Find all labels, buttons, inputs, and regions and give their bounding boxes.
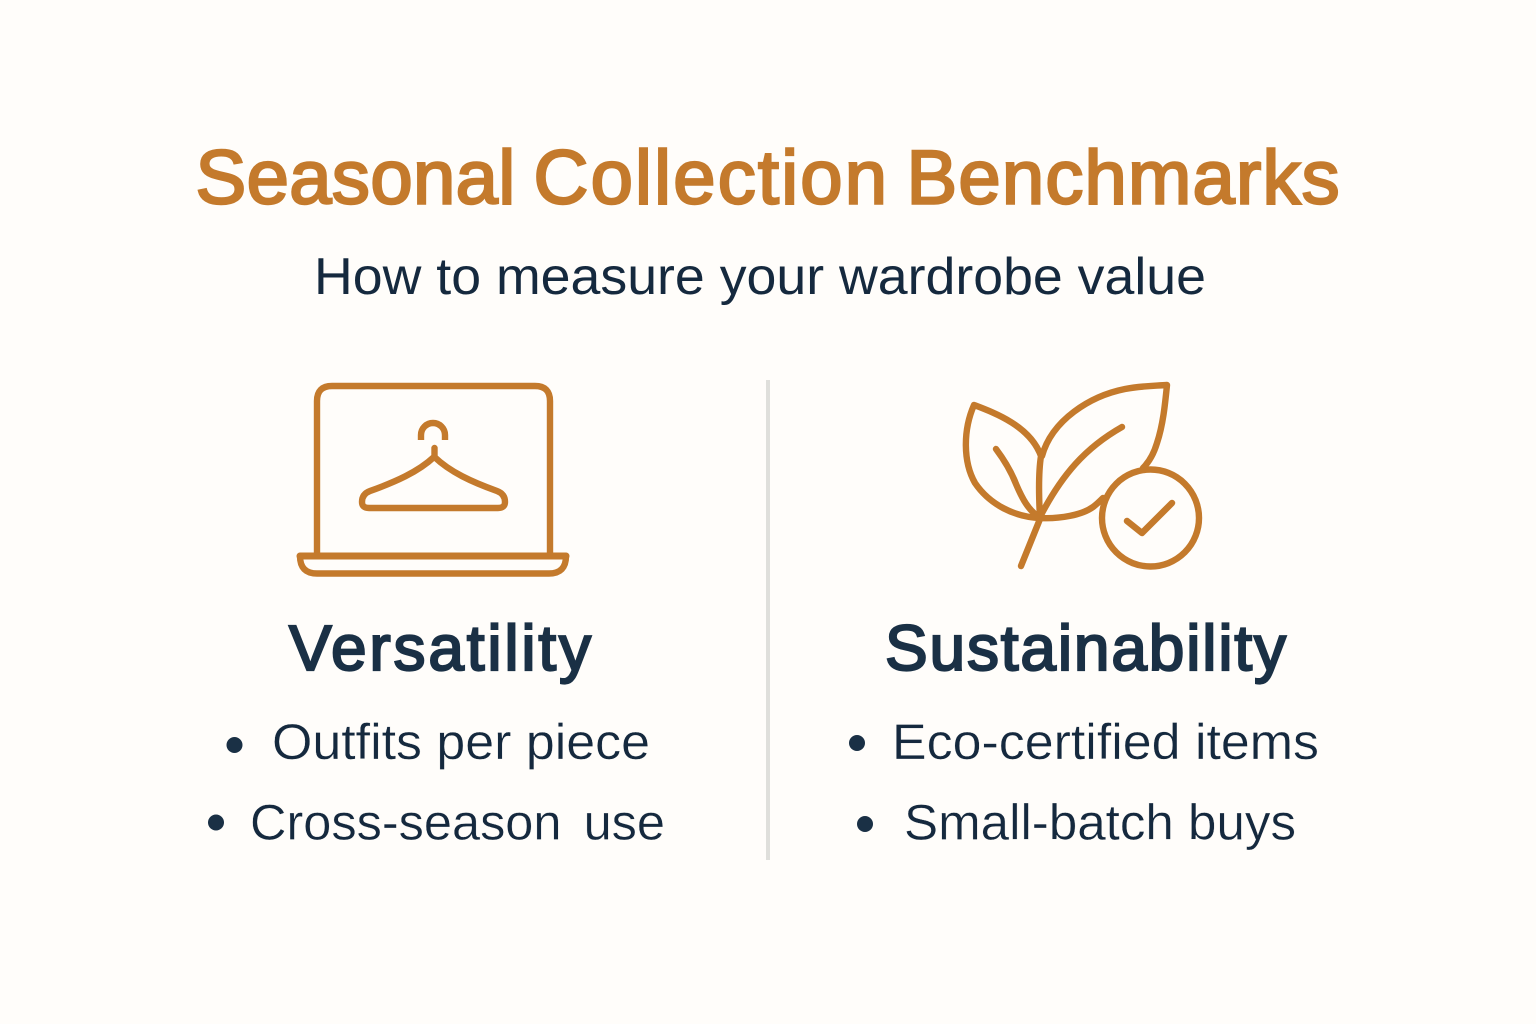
title: Seasonal (196, 136, 516, 220)
subtitle: How to measure your wardrobe value (314, 248, 1206, 306)
bullet list: versatility: Cross-season use (250, 794, 665, 850)
icon: laptop with hanger (300, 386, 566, 574)
bullet list: sustainability: Small-batch buys (904, 794, 1296, 850)
panel: versatility (208, 386, 665, 850)
heading: sustainability: Sustainability (885, 612, 1286, 684)
heading: versatility: Versatility (289, 612, 591, 684)
title: Collection (534, 136, 889, 220)
panel: sustainability (849, 385, 1319, 850)
icon: check badge (1102, 470, 1199, 566)
bullet list: sustainability (849, 714, 1319, 850)
bullet list: versatility (208, 714, 665, 850)
bullet list: sustainability: Eco-certified items (892, 714, 1319, 770)
bullet list: versatility: Outfits per piece (272, 714, 650, 770)
title: Benchmarks (906, 136, 1341, 220)
divider (766, 380, 770, 860)
icon: leaves with check badge (966, 385, 1199, 566)
